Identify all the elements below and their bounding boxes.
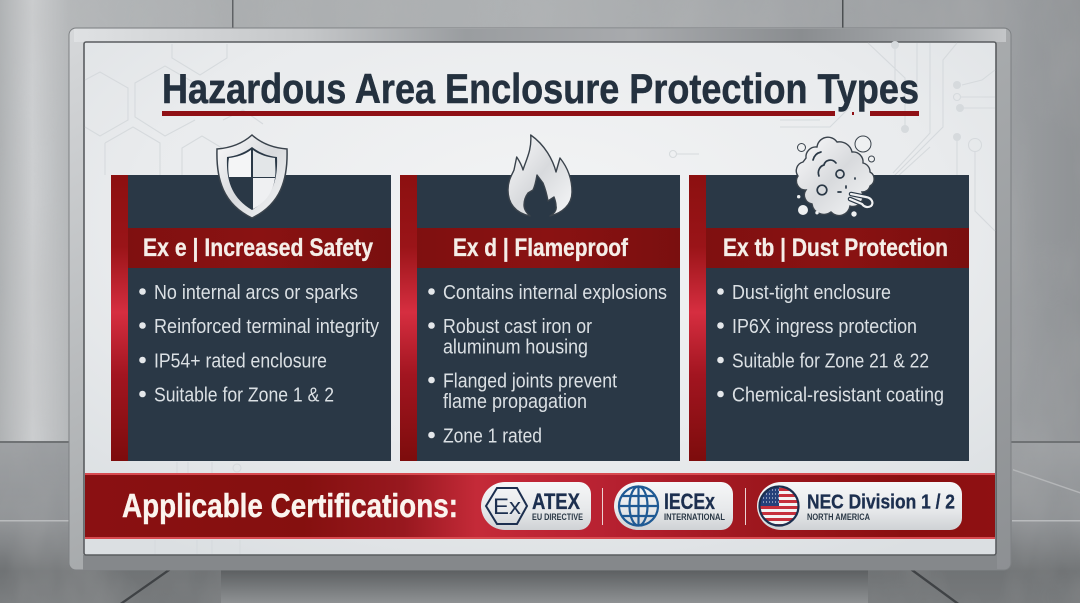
badge: NEC: NEC Division 1 / 2: [807, 492, 955, 514]
bullet list: Ex e: Suitable for Zone 1 & 2: [154, 384, 334, 406]
icon: US flag: [759, 486, 799, 527]
bullet list: Ex e: [139, 282, 379, 406]
badge: IECEx: INTERNATIONAL: [664, 512, 725, 523]
icon detail: dust swirl: [850, 194, 872, 207]
title underline: [162, 111, 919, 116]
badge: NEC: [757, 482, 962, 530]
panel: Ex tb Dust Protection: [689, 175, 969, 461]
icon: shield: [217, 135, 287, 218]
metal frame: [69, 28, 1011, 570]
circuit nodes: [891, 41, 964, 141]
bullet list: Ex e: IP54+ rated enclosure: [154, 350, 327, 372]
panel: Ex e Increased Safety: [111, 175, 391, 461]
bullet list: Ex d: [428, 282, 667, 448]
badge: ATEX: EU DIRECTIVE: [532, 512, 583, 523]
badge: IECEx: [614, 482, 733, 530]
bullet list: Ex d: Zone 1 rated: [443, 426, 542, 448]
icon detail: dust particles: [797, 136, 874, 217]
badge: ATEX: [481, 482, 591, 530]
display screen: [84, 42, 996, 555]
bullet list: Ex tb: [717, 282, 944, 406]
icon: dust cloud: [796, 136, 874, 217]
badge: ATEX: ATEX: [532, 489, 580, 514]
bullet list: Ex d: aluminum housing: [443, 336, 588, 358]
bullet list: Ex tb: IP6X ingress protection: [732, 316, 917, 338]
badge: ATEX: Ex: [493, 494, 521, 519]
faint hexagon and circuit pattern: [85, 43, 995, 554]
bullet list: Ex d: Robust cast iron or: [443, 316, 592, 338]
bullet list: Ex e: Reinforced terminal integrity: [154, 316, 379, 338]
band heading: Applicable Certifications:: [122, 487, 458, 524]
heading: Ex d: Ex d | Flameproof: [453, 234, 629, 262]
bullet list: Ex d: Flanged joints prevent: [443, 370, 617, 392]
badge: IECEx: IECEx: [664, 489, 716, 514]
bullet list: Ex d: flame propagation: [443, 391, 587, 413]
badge: NEC: NORTH AMERICA: [807, 512, 870, 523]
bullet list: Ex tb: Chemical-resistant coating: [732, 384, 944, 406]
title: Hazardous Area Enclosure Protection Types: [162, 65, 919, 112]
heading: Ex e: Ex e | Increased Safety: [143, 234, 373, 262]
panel: Ex d Flameproof: [400, 175, 680, 461]
bullet list: Ex tb: Suitable for Zone 21 & 22: [732, 350, 929, 372]
bullet list: Ex tb: Dust-tight enclosure: [732, 282, 891, 304]
certifications band: [85, 473, 995, 539]
bullet list: Ex d: Contains internal explosions: [443, 282, 667, 304]
monitor stand: [221, 570, 868, 603]
heading: Ex tb: Ex tb | Dust Protection: [723, 234, 948, 262]
icon: flame: [508, 135, 572, 216]
divider lines: [602, 488, 746, 525]
bullet list: Ex e: No internal arcs or sparks: [154, 282, 358, 304]
